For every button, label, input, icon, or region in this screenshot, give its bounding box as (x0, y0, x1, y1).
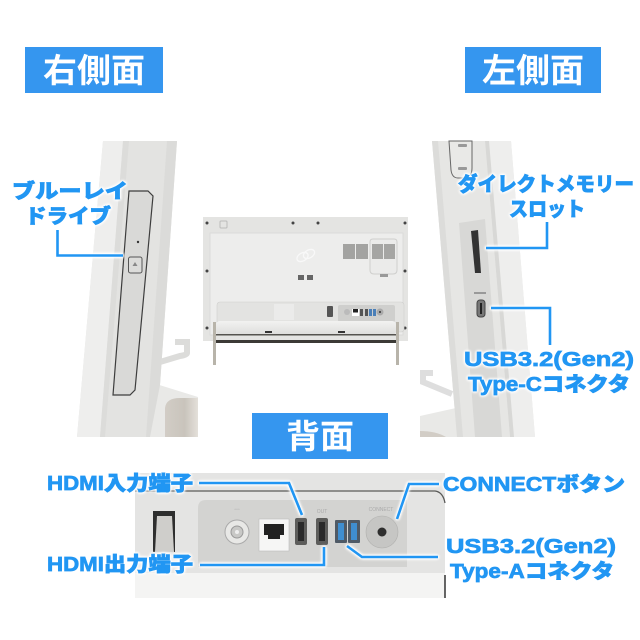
label: HDMI input (47, 472, 302, 515)
heading: left side: 左側面 (482, 44, 584, 92)
label: direct memory slot (458, 172, 634, 248)
label: USB Type-A connector: Type-Aコネクタ (450, 560, 614, 583)
label: USB Type-A connector: USB3.2(Gen2) (446, 536, 616, 558)
heading: rear (252, 410, 388, 459)
label: USB Type-A connector (347, 536, 616, 583)
label: CONNECT button (397, 473, 625, 519)
photo: rear of PC (203, 217, 408, 365)
label: Blu-ray drive: ブルーレイ (12, 179, 128, 203)
photo: rear ports close-up: ▫▫▫ (234, 507, 240, 513)
label: HDMI output: HDMI出力端子 (47, 553, 193, 576)
label: USB Type-C connector: USB3.2(Gen2) (464, 349, 634, 371)
label: Blu-ray drive (12, 179, 128, 256)
photo: left side of PC (420, 141, 535, 437)
photo: rear ports close-up: OUT (317, 509, 327, 515)
label: HDMI input: HDMI入力端子 (47, 472, 193, 495)
label: direct memory slot: スロット (509, 199, 585, 221)
label: CONNECT button: CONNECTボタン (443, 473, 625, 496)
heading: rear: 背面 (286, 410, 354, 458)
heading: right side: 右側面 (43, 44, 145, 92)
label: USB Type-C connector: Type-Cコネクタ (468, 373, 630, 396)
photo: rear ports close-up: CONNECT (369, 507, 393, 513)
label: Blu-ray drive: ドライブ (25, 204, 111, 228)
photo: right side of PC (77, 141, 198, 437)
label: direct memory slot: ダイレクトメモリー (458, 172, 634, 196)
label: HDMI output (47, 547, 324, 576)
photo: rear ports close-up (135, 473, 445, 598)
label: USB Type-C connector (464, 308, 634, 396)
